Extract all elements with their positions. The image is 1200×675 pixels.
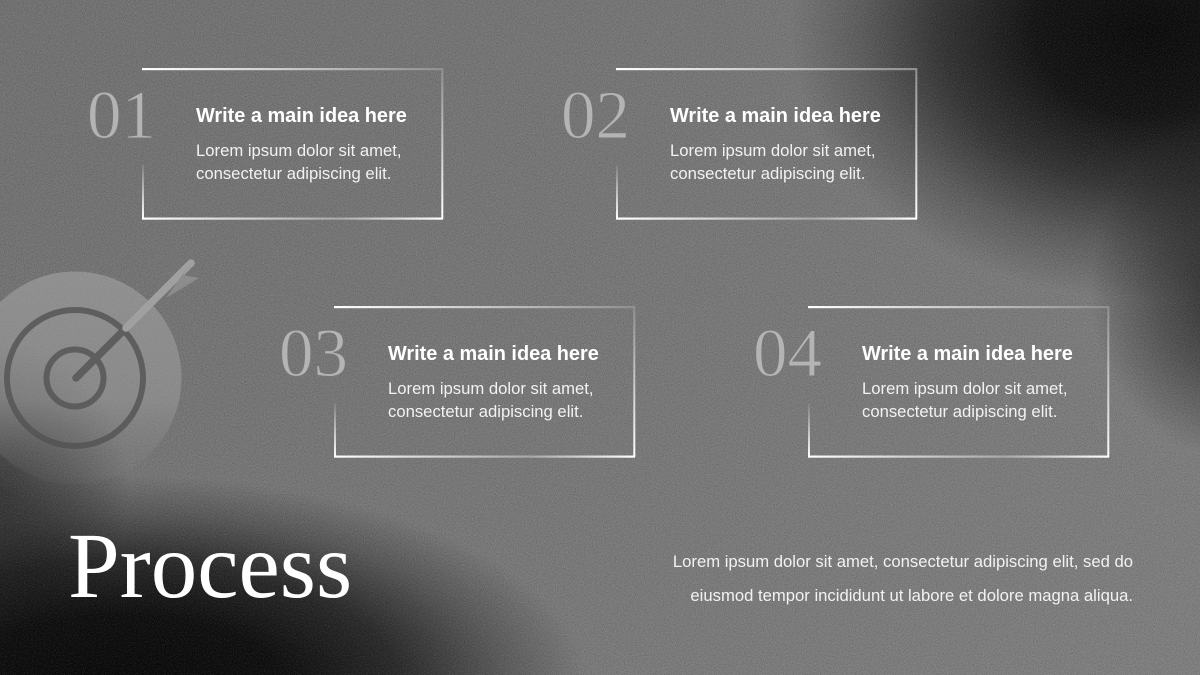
heading 03: Write a main idea here (388, 343, 599, 365)
number 04: 04 (753, 315, 822, 391)
text 01: Lorem ipsum dolor sit amet, (196, 141, 402, 160)
description text (673, 552, 1133, 604)
item 02 (561, 68, 918, 220)
text 02 (670, 141, 876, 183)
text 02: Lorem ipsum dolor sit amet, (670, 141, 876, 160)
description text: eiusmod tempor incididunt ut labore et dolore magna aliqua. (690, 586, 1133, 604)
text 01: consectetur adipiscing elit. (196, 164, 391, 183)
number 03: 03 (279, 315, 348, 391)
text 03: consectetur adipiscing elit. (388, 402, 583, 421)
frame 04 (808, 306, 1110, 458)
frame 01 (142, 68, 444, 220)
heading 02: Write a main idea here (670, 105, 881, 127)
text 01 (196, 141, 402, 183)
text 02: consectetur adipiscing elit. (670, 164, 865, 183)
text 04 (862, 379, 1068, 421)
description text: Lorem ipsum dolor sit amet, consectetur adipiscing elit, sed do (673, 552, 1133, 571)
number 02: 02 (561, 77, 630, 153)
title: Process (68, 515, 352, 618)
number 01: 01 (87, 77, 156, 153)
text 03: Lorem ipsum dolor sit amet, (388, 379, 594, 398)
frame 03 (334, 306, 636, 458)
heading 01: Write a main idea here (196, 105, 407, 127)
item 04 (753, 306, 1110, 458)
text 03 (388, 379, 594, 421)
frame 02 (616, 68, 918, 220)
text 04: Lorem ipsum dolor sit amet, (862, 379, 1068, 398)
item 03 (279, 306, 636, 458)
text 04: consectetur adipiscing elit. (862, 402, 1057, 421)
item 01 (87, 68, 444, 220)
icon: target with arrow (0, 259, 199, 472)
heading 04: Write a main idea here (862, 343, 1073, 365)
